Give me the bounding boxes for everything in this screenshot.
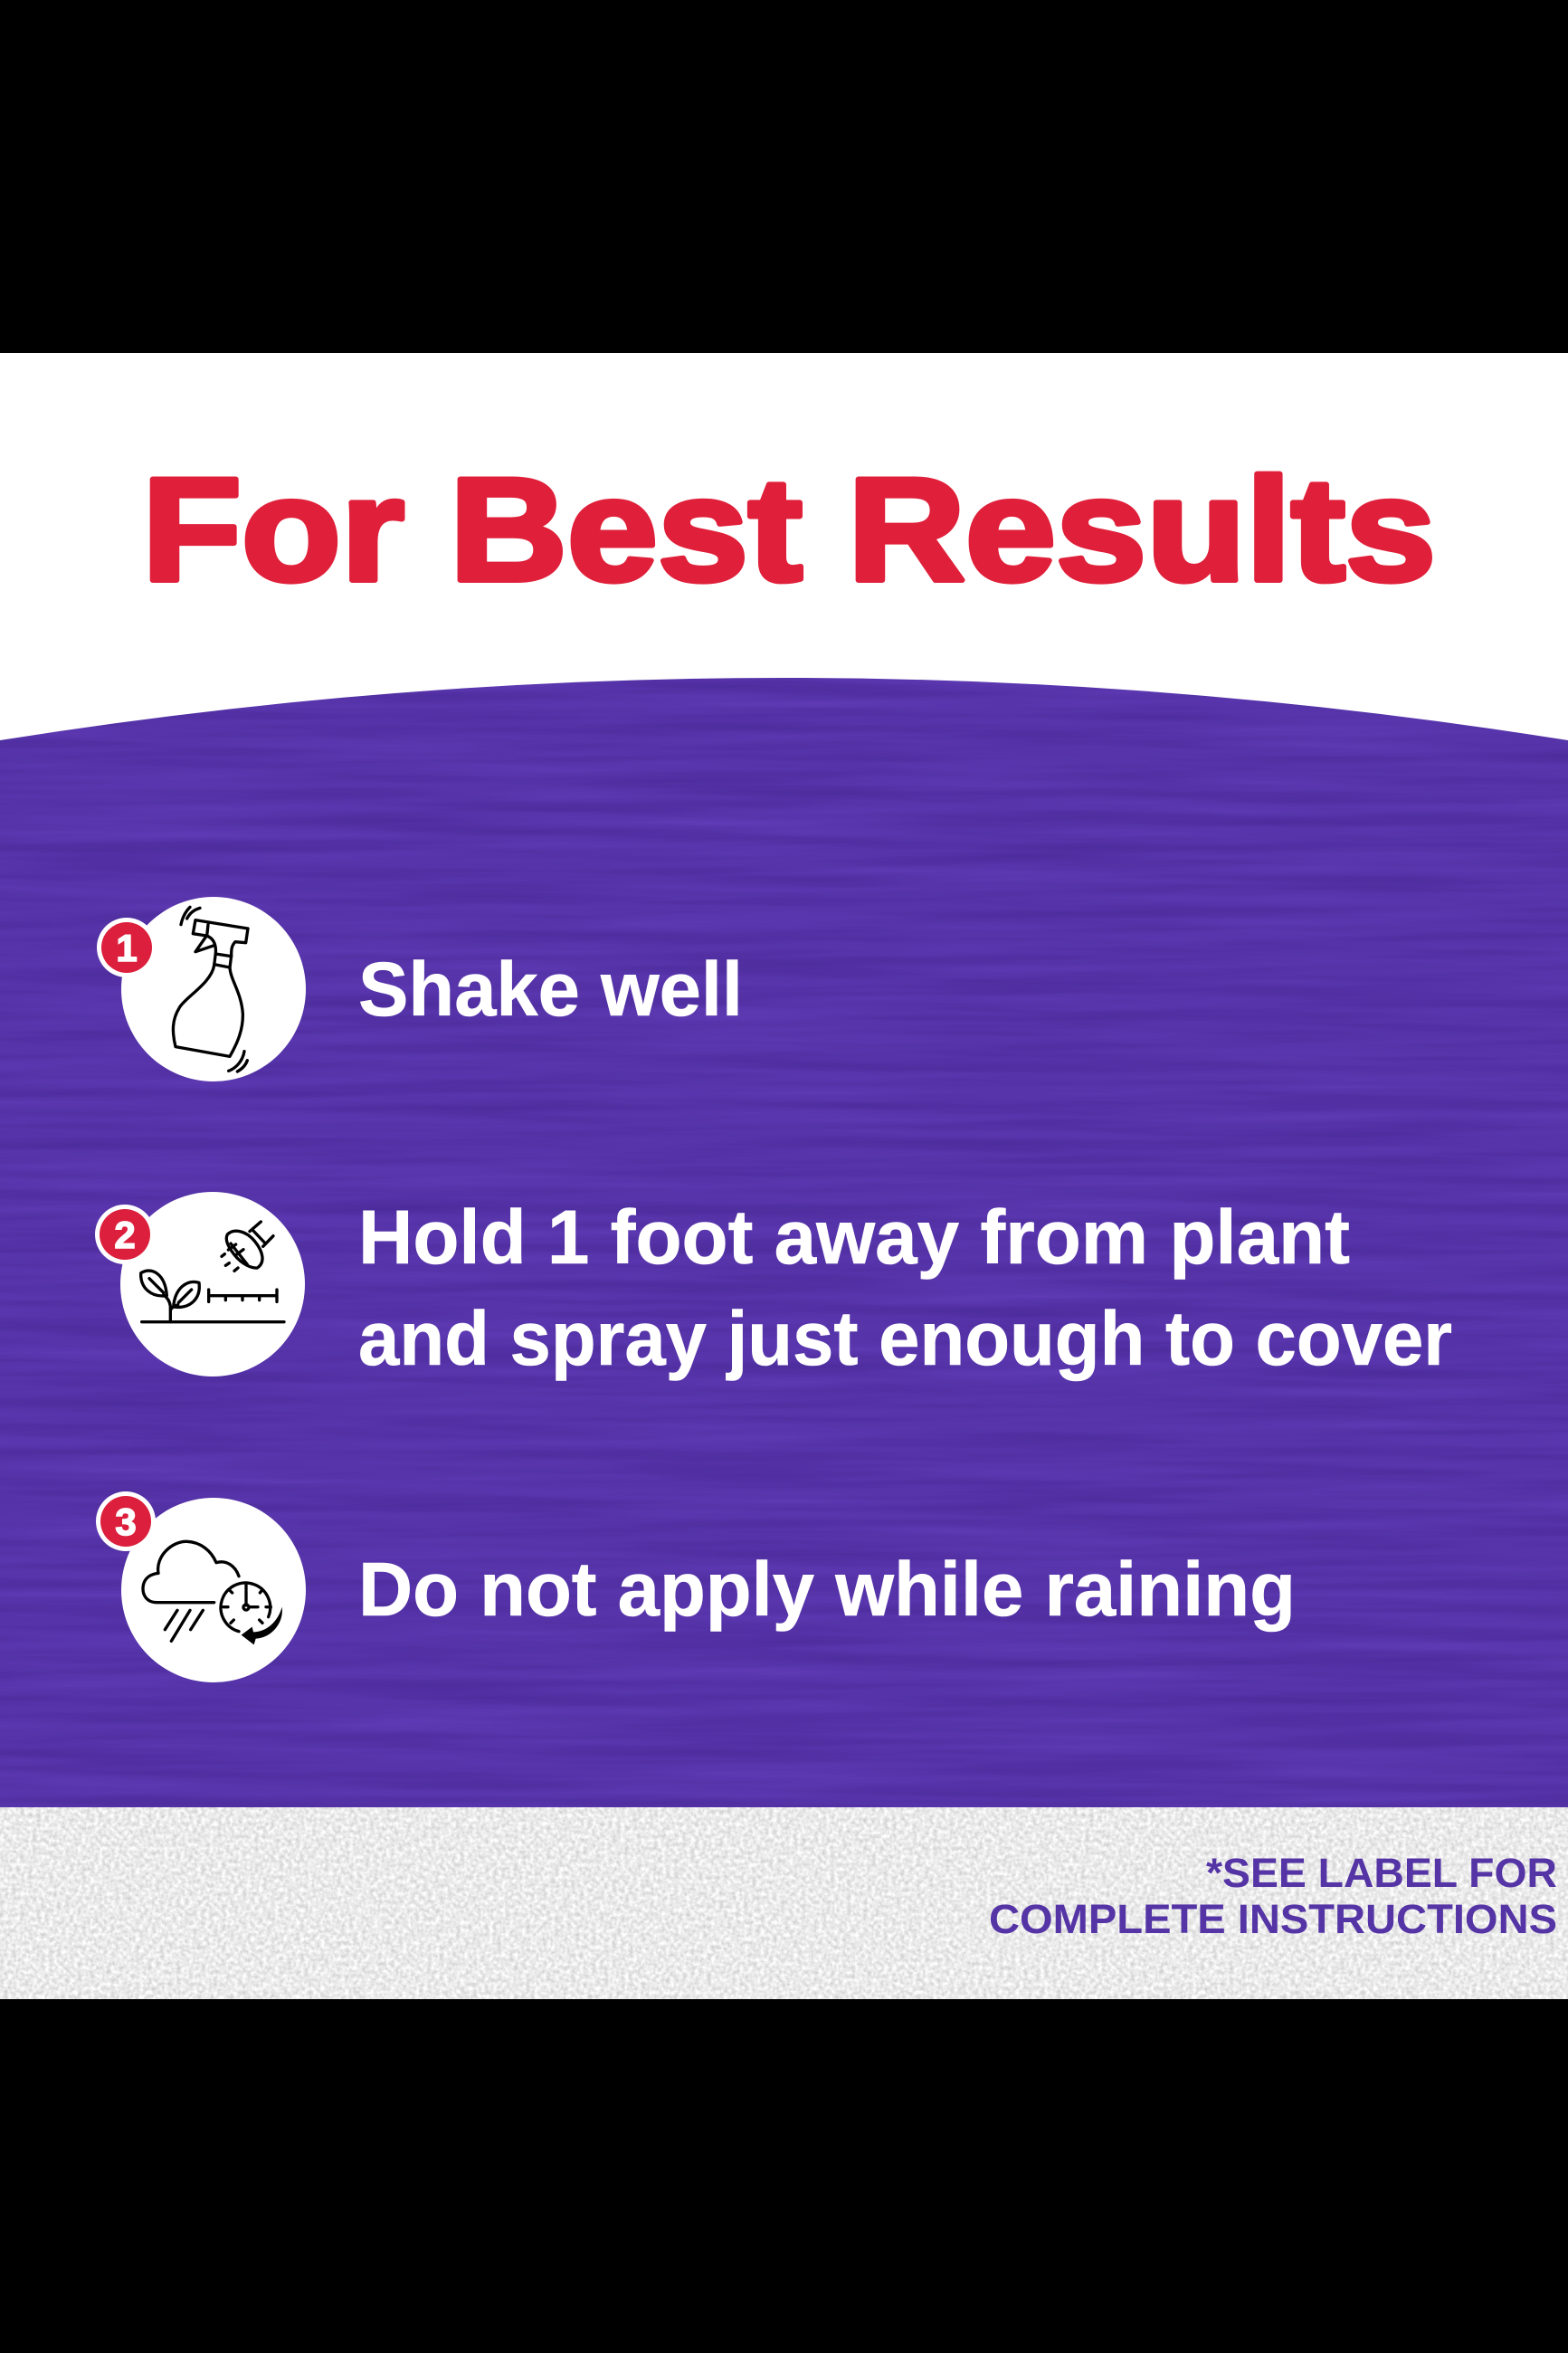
badge: number 1: 1 [116, 927, 138, 969]
step 2 [95, 1192, 1452, 1381]
badge: number 1 [97, 918, 157, 977]
panel: textured footer strip [0, 1807, 1568, 1999]
icon: plant and sprayer with distance ruler in white circle [120, 1192, 305, 1377]
step text: hold and spray: and spray just enough to cover [358, 1296, 1452, 1381]
footnote text [989, 1850, 1557, 1942]
footnote text: COMPLETE INSTRUCTIONS [989, 1896, 1557, 1942]
step 3 [96, 1491, 1296, 1682]
badge: number 2 [95, 1205, 155, 1264]
step 1 [97, 897, 743, 1081]
top black band [0, 0, 1568, 353]
badge: number 3: 3 [115, 1500, 137, 1543]
title: For Best Results [142, 448, 1436, 612]
bottom black band [0, 2000, 1568, 2353]
badge: number 2: 2 [114, 1214, 136, 1256]
white header panel [0, 353, 1568, 751]
step text: shake well: Shake well [358, 947, 743, 1032]
step text: hold and spray [358, 1195, 1452, 1381]
panel: purple textured wood background [0, 670, 1568, 1807]
icon: rain cloud and clock in white circle [121, 1498, 306, 1682]
step text: do not apply while raining: Do not apply while raining [358, 1547, 1296, 1632]
footnote text: *SEE LABEL FOR [1206, 1850, 1557, 1896]
step text: hold and spray: Hold 1 foot away from plant [358, 1195, 1350, 1280]
icon: spray bottle in white circle [121, 897, 306, 1081]
badge: number 3 [96, 1491, 156, 1551]
